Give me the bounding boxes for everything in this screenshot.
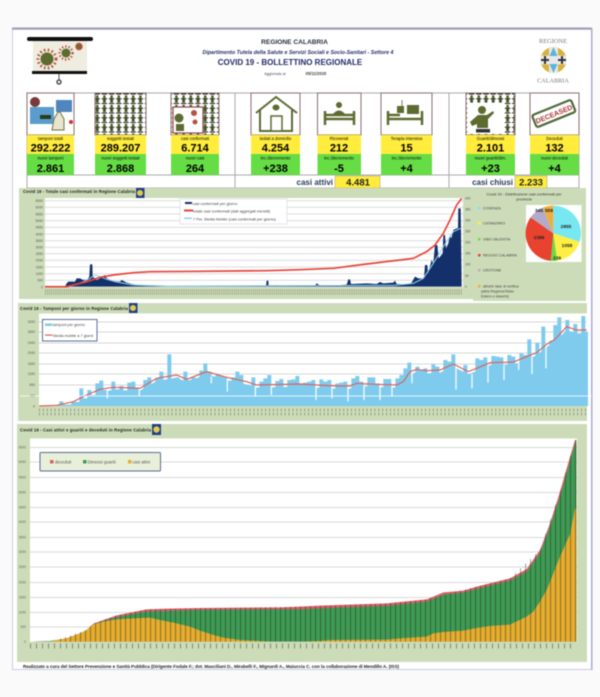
date axis xyxy=(39,410,587,414)
legend: tamponi xyxy=(42,320,97,341)
KPI: tamponi totali xyxy=(27,93,74,175)
axis labels: 4000 xyxy=(19,520,26,524)
KPI: terapia intensiva: 15 xyxy=(400,142,413,154)
axis labels: 3200 xyxy=(28,320,35,324)
right axis labels: 50 xyxy=(465,274,469,278)
right axis labels: 100 xyxy=(465,262,471,266)
KPI: guariti/dimessi: nuovi guariti/dim. xyxy=(475,156,506,160)
panel: casi confermati chart xyxy=(19,188,473,299)
left axis labels: 3500 xyxy=(36,239,43,243)
pie chart: 239 xyxy=(553,256,561,262)
panel: casi attivi guariti deceduti chart xyxy=(17,424,587,662)
KPI: ricoverati: Ricoverati xyxy=(330,136,348,141)
chart title: casi attivi: Covid 19 - Casi attivi e guariti e deceduti in Regione Calabria xyxy=(20,428,152,432)
legend: casi attivi xyxy=(40,452,160,471)
KPI: casi confermati: nuovi casi xyxy=(186,156,204,160)
axis labels: 2400 xyxy=(28,341,35,345)
chart title: casi confermati: Covid 19 - Totale casi confermati in Regione Calabria xyxy=(23,189,136,194)
icon: emblem xyxy=(129,303,138,313)
title block: 05/11/2020 xyxy=(306,71,327,76)
left axis labels: 1500 xyxy=(36,265,43,269)
axis labels: 3500 xyxy=(19,536,26,540)
KPI: deceduti: DECEASED xyxy=(535,104,574,125)
KPI: isolati a domicilio: +238 xyxy=(263,163,288,175)
area: fill under moving average xyxy=(100,330,587,406)
pie legend: VIBO VALENTIA xyxy=(483,238,511,242)
logo: Regione Calabria: CALABRIA xyxy=(537,78,569,84)
callout: casi chiusi xyxy=(472,176,547,188)
KPI frame xyxy=(27,93,579,188)
left axis labels: 4000 xyxy=(36,232,43,236)
axis labels: 2800 xyxy=(28,330,35,334)
pie legend: REGGIO CALABRIA xyxy=(483,254,518,258)
icon: emblem xyxy=(136,188,144,198)
axis labels: 5000 xyxy=(19,490,26,494)
pie title: Covid 19 - Distribuzione casi confermati per xyxy=(486,192,562,196)
area: casi attivi xyxy=(30,508,576,642)
callout: casi chiusi: casi chiusi xyxy=(472,178,513,187)
KPI: isolati a domicilio: inc./decremento xyxy=(261,156,291,160)
legend: tamponi: tamponi per giorno xyxy=(52,322,85,327)
left axis labels: 2000 xyxy=(36,259,43,263)
axis labels xyxy=(28,320,35,408)
legend: casi attivi: casi attivi xyxy=(132,459,150,464)
KPI: isolati a domicilio xyxy=(251,93,300,175)
KPI: deceduti: +4 xyxy=(548,163,562,175)
KPI: soggetti testati: 2.868 xyxy=(107,163,134,175)
KPI: guariti/dimessi: 2.101 xyxy=(477,142,504,154)
date axis xyxy=(30,644,574,648)
axis labels: 1600 xyxy=(28,362,35,366)
legend: casi confermati: casi confermati per giorno xyxy=(192,201,237,206)
axis labels: 1500 xyxy=(19,596,26,600)
KPI: soggetti testati: nuovi soggetti testati xyxy=(101,156,140,160)
icon: emblem xyxy=(152,424,161,435)
pie chart: 345 xyxy=(535,208,543,214)
right axis labels: 150 xyxy=(465,252,471,256)
legend: casi confermati: 7 Per. Media Mobile (casi confermati per giorno) xyxy=(193,216,277,221)
axis labels: 1200 xyxy=(28,372,35,376)
right axis labels: 350 xyxy=(465,208,471,212)
axis labels: 2500 xyxy=(19,565,26,569)
pie legend: Estero o sbarchi) xyxy=(481,294,509,298)
legend: casi confermati: totale casi confermati (dati aggregati mensili) xyxy=(193,208,271,214)
KPI: soggetti testati: 289.207 xyxy=(101,142,140,154)
right axis labels: 250 xyxy=(465,230,471,234)
callout: casi chiusi: 2.233 xyxy=(519,178,543,188)
KPI: ricoverati: inc./decremento xyxy=(324,156,355,160)
KPI: isolati a domicilio: isolati a domicilio xyxy=(260,136,292,141)
bars: casi per giorno xyxy=(65,208,462,287)
panel: tamponi per giorno chart xyxy=(18,303,592,421)
pie title: provincia xyxy=(516,196,533,201)
KPI: deceduti: Deceduti xyxy=(546,136,563,141)
pie chart: 2389 xyxy=(534,235,545,241)
bars: daily dips xyxy=(107,346,546,402)
KPI: terapia intensiva: +4 xyxy=(400,163,414,175)
legend: tamponi: Media mobile a 7 giorni xyxy=(53,333,93,338)
right axis labels xyxy=(465,196,471,289)
axis labels: 5500 xyxy=(19,476,26,480)
axis labels xyxy=(19,446,26,644)
pie legend xyxy=(478,206,520,298)
KPI: casi confermati: 6.714 xyxy=(181,142,210,154)
KPI: soggetti testati: soggetti testati xyxy=(107,136,134,141)
KPI: tamponi totali: tamponi totali xyxy=(38,136,63,141)
right axis labels: 300 xyxy=(465,218,471,222)
axis labels: 400 xyxy=(29,394,35,398)
line: totale casi xyxy=(45,198,462,287)
axis labels: 800 xyxy=(29,383,35,387)
left axis labels: 4500 xyxy=(36,226,43,230)
axis labels: 3000 xyxy=(19,550,26,554)
legend: casi attivi: Dimessi guariti xyxy=(88,459,116,464)
logo: Regione Calabria: REGIONE xyxy=(539,38,567,45)
pie chart xyxy=(526,206,581,262)
KPI: ricoverati: 212 xyxy=(330,142,348,154)
axis labels: 2000 xyxy=(19,580,26,584)
pie chart: 2855 xyxy=(561,224,572,230)
left axis labels: 2500 xyxy=(36,252,43,256)
left axis labels: 6000 xyxy=(36,206,43,210)
KPI: guariti/dimessi: +23 xyxy=(481,163,500,175)
axis labels: 4500 xyxy=(19,506,26,510)
pie legend: CATANZARO xyxy=(483,222,505,226)
KPI: casi confermati xyxy=(171,93,219,175)
KPI: guariti/dimessi: Guariti/dimessi xyxy=(477,136,504,141)
left axis labels: 0 xyxy=(41,285,43,289)
logo: Regione Calabria xyxy=(537,38,569,84)
KPI: guariti/dimessi xyxy=(466,93,515,175)
title block: Aggiornato al xyxy=(264,72,286,76)
left axis labels: 500 xyxy=(37,279,43,283)
KPI: terapia intensiva: inc./decremento xyxy=(392,156,422,160)
axis labels: 6000 xyxy=(19,460,26,464)
footer credit: Realizzato a cura del Settore Prevenzione e Sanità Pubblica (Dirigente Fodale F.; dot. Masciliani D., Mirabelli F., Mignardi A., Maiuccia C. con la collaborazione di Mendillo A. (ISS) xyxy=(23,664,399,669)
icon: projector screen with viruses xyxy=(27,37,93,84)
chart title: tamponi: Covid 19 - Tamponi per giorno in Regione Calabria xyxy=(20,306,129,311)
left axis labels: 6500 xyxy=(36,199,43,203)
bars: tamponi xyxy=(39,316,588,406)
callout: casi attivi xyxy=(297,176,380,188)
bars: stacked column separators xyxy=(57,440,576,642)
KPI: deceduti: nuovi deceduti xyxy=(541,156,568,160)
title block: COVID 19 - BOLLETTINO REGIONALE xyxy=(218,58,363,67)
KPI: deceduti xyxy=(530,93,579,175)
KPI: soggetti testati xyxy=(95,93,146,175)
title block xyxy=(203,39,394,76)
KPI: terapia intensiva: Terapia intensiva xyxy=(391,136,423,141)
left axis labels: 5000 xyxy=(36,219,43,223)
pie chart: 1058 xyxy=(562,243,573,249)
KPI: casi confermati: casi confermati xyxy=(181,136,209,141)
KPI: ricoverati xyxy=(318,93,361,175)
KPI: deceduti: 132 xyxy=(545,142,564,154)
callout: casi attivi: casi attivi xyxy=(297,178,333,187)
left axis labels xyxy=(36,199,43,289)
KPI: terapia intensiva xyxy=(381,93,432,175)
date axis xyxy=(45,290,462,294)
axis labels: 500 xyxy=(20,625,26,629)
pie legend: altra/in fase di verifica xyxy=(483,284,519,288)
right axis labels: 400 xyxy=(465,196,471,200)
legend: casi confermati xyxy=(180,199,287,224)
KPI: tamponi totali: 292.222 xyxy=(31,142,70,154)
line: media mobile tamponi xyxy=(39,327,587,406)
KPI: tamponi totali: nuovi tamponi xyxy=(37,156,64,160)
right axis labels: 200 xyxy=(465,240,471,244)
axis labels: 0 xyxy=(24,640,26,644)
left axis labels: 1000 xyxy=(36,272,43,276)
panel: distribuzione per provincia xyxy=(473,188,586,301)
pie legend: COSENZA xyxy=(483,206,501,210)
left axis labels: 5500 xyxy=(36,212,43,216)
KPI: tamponi totali: 2.861 xyxy=(37,163,64,175)
axis labels: 1000 xyxy=(19,610,26,614)
right axis labels: 0 xyxy=(465,285,467,289)
KPI: isolati a domicilio: 4.254 xyxy=(262,142,290,154)
axis labels: 2000 xyxy=(28,351,35,355)
KPI: casi confermati: 264 xyxy=(186,163,205,175)
title block: Dipartimento Tutela della Salute e Servizi Sociali e Socio-Sanitari - Settore 4 xyxy=(203,50,394,56)
KPI: ricoverati: -5 xyxy=(334,163,344,175)
pie legend: (altra Regione/Stato xyxy=(481,290,514,294)
callout: casi attivi: 4.481 xyxy=(346,178,371,188)
pie chart: 558 xyxy=(545,208,553,214)
title block: REGIONE CALABRIA xyxy=(261,39,328,46)
line: media mobile xyxy=(45,228,461,287)
area: deceduti xyxy=(30,440,576,642)
pie legend: CROTONE xyxy=(483,268,502,272)
area: dimessi guariti xyxy=(30,443,576,642)
legend: casi attivi: deceduti xyxy=(55,459,71,464)
axis labels: 0 xyxy=(33,404,35,408)
left axis labels: 3000 xyxy=(36,246,43,250)
axis labels: 6500 xyxy=(19,446,26,450)
